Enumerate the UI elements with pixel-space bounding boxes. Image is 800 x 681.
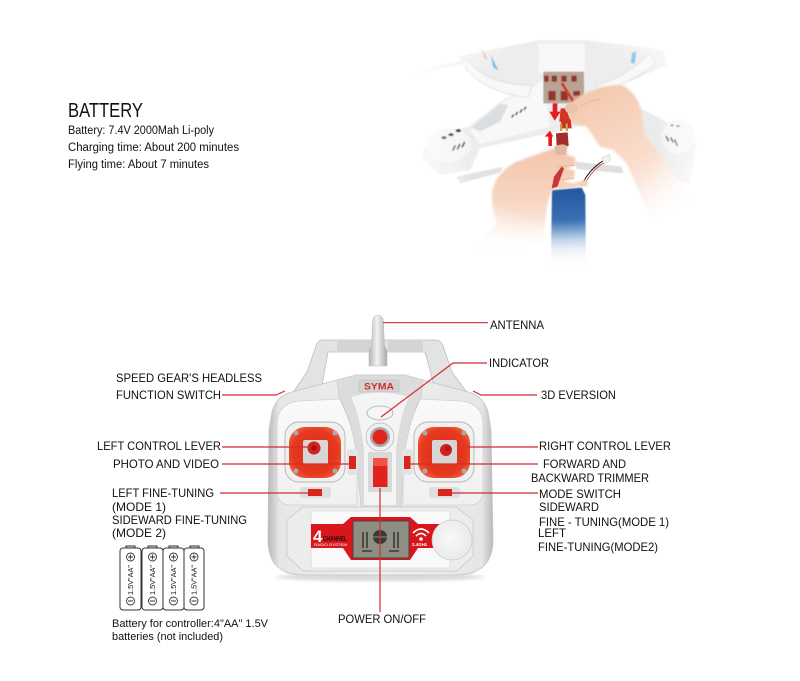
- labels: right side: SIDEWARD: [539, 500, 599, 514]
- icon: four AA batteries: 1.5V"AA": [169, 565, 178, 595]
- SYMA logo: [359, 380, 399, 392]
- centre panel: [337, 375, 423, 507]
- front panel: RADIO SYSTEM: [314, 543, 347, 547]
- labels: right side: FINE-TUNING(MODE2): [538, 540, 658, 554]
- labels: left side: LEFT FINE-TUNING: [112, 486, 214, 500]
- side trimmers: [347, 449, 413, 475]
- text block: battery specs: Battery: 7.4V 2000Mah Li-poly: [68, 125, 214, 137]
- antenna: [369, 315, 387, 366]
- labels: right side: MODE SWITCH: [539, 487, 621, 501]
- text block: battery specs: [68, 125, 239, 171]
- icon: four AA batteries: [120, 546, 204, 610]
- right hand: [564, 84, 678, 207]
- drone body: [432, 40, 693, 184]
- labels: left side: (MODE 2): [112, 526, 166, 540]
- labels: left side: LEFT CONTROL LEVER: [97, 439, 221, 453]
- labels: left side: SPEED GEAR'S HEADLESS: [116, 371, 262, 385]
- labels: right side: RIGHT CONTROL LEVER: [539, 439, 671, 453]
- battery pack: [550, 187, 586, 256]
- left stick: [285, 422, 345, 482]
- front panel: CHANNEL: [323, 536, 347, 543]
- text block: controller battery note: [112, 618, 269, 643]
- front panel: 4: [313, 527, 323, 546]
- power knob: [366, 423, 394, 451]
- SYMA logo: SYMA: [364, 382, 395, 392]
- battery compartment: [543, 72, 584, 103]
- labels: right side: ANTENNA: [490, 318, 544, 332]
- left hand: [491, 147, 589, 238]
- icon: four AA batteries: 1.5V"AA": [126, 565, 135, 595]
- fine tune buttons: [300, 487, 460, 498]
- photo: hands connecting battery to drone: [432, 40, 693, 256]
- labels: right side: FORWARD AND: [543, 457, 626, 471]
- labels: left side: SIDEWARD FINE-TUNING: [112, 513, 247, 527]
- controller body: [268, 375, 493, 575]
- icon: four AA batteries: 1.5V"AA": [148, 565, 157, 595]
- labels: left side: PHOTO AND VIDEO: [113, 457, 219, 471]
- carrying handle: [292, 340, 468, 396]
- labels: right side: INDICATOR: [489, 356, 549, 370]
- power slider: [368, 452, 392, 492]
- text block: controller battery note: Battery for controller:4"AA" 1.5V: [112, 618, 269, 630]
- text block: battery specs: Charging time: About 200 minutes: [68, 142, 239, 154]
- side plates: [277, 399, 357, 505]
- text block: controller battery note: batteries (not included): [112, 631, 223, 643]
- lcd screen: [353, 521, 409, 558]
- connector lower: [556, 132, 569, 147]
- wifi icon: [412, 529, 429, 547]
- text block: battery specs: Flying time: About 7 minutes: [68, 159, 209, 171]
- labels: right side: FINE - TUNING(MODE 1): [539, 515, 669, 529]
- labels: left side: [97, 371, 262, 540]
- red arrows: [549, 103, 561, 121]
- controller: [268, 315, 493, 581]
- wifi icon: 2.4GHz: [412, 542, 428, 547]
- callout lines: [220, 323, 538, 612]
- labels: right side: LEFT: [538, 526, 567, 540]
- labels: right side: BACKWARD TRIMMER: [531, 471, 649, 485]
- labels: right side: POWER ON/OFF: [338, 612, 426, 626]
- labels: right side: 3D EVERSION: [541, 388, 616, 402]
- labels: right side: [338, 318, 671, 626]
- labels: left side: (MODE 1): [112, 500, 166, 514]
- white dial: [432, 520, 472, 560]
- wires: [582, 161, 603, 186]
- right stick: [414, 422, 474, 482]
- front panel: [287, 507, 473, 571]
- shadow under controller: [276, 573, 484, 581]
- icon: four AA batteries: 1.5V"AA": [190, 565, 198, 595]
- indicator light: [367, 406, 393, 420]
- labels: left side: FUNCTION SWITCH: [116, 388, 221, 402]
- heading: battery: BATTERY: [68, 100, 143, 122]
